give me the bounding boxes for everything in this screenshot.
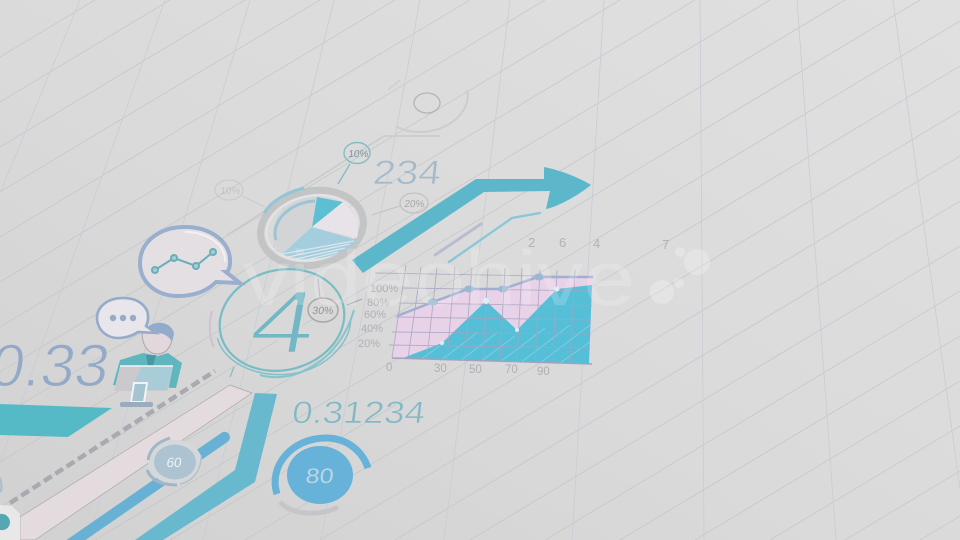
target icon top [388,80,468,132]
x labels: 0 [386,362,392,374]
x labels: 90 [537,366,550,378]
callout: 20% [372,193,428,215]
y labels [358,283,398,350]
gauge: 60 [147,438,202,485]
callout: 30% [308,279,338,322]
arrow [352,167,591,273]
slim lines [435,213,540,262]
faint callout: 10% [215,180,265,207]
pink band [20,385,252,540]
x labels [386,362,550,378]
teal band [0,404,112,437]
top labels: 7 [662,237,669,252]
callout: 20%: 20% [404,199,425,210]
number 0.31234: 0.31234 [290,395,427,430]
faint callout: 10%: 10% [220,186,241,197]
line series [397,277,593,316]
torso [113,353,182,388]
y labels: 100% [370,283,398,295]
gear icon [0,505,20,540]
top labels: 4 [593,236,600,251]
x labels: 70 [505,364,518,376]
gauge: 80 [275,438,368,513]
big ring with number 4 [205,255,362,390]
area chart [358,235,669,378]
stand [131,383,147,402]
laptop [114,366,173,391]
top labels [528,235,669,252]
big ring with number 4: 4 [243,272,325,373]
y labels: 60% [364,309,386,321]
speech bubble: dots [97,298,156,338]
callout: 10%: 10% [348,149,369,160]
person with laptop [113,323,182,407]
hair [146,323,174,342]
small arc [0,478,2,492]
connector line [227,136,440,235]
head [142,328,172,354]
callout: 30%: 30% [312,305,334,317]
blue bar [66,432,230,540]
baseline [392,358,592,364]
y labels: 20% [358,338,380,350]
gauge: 80: 80 [305,464,335,488]
number 234: 234 [371,154,443,192]
top labels: 6 [559,235,566,250]
gauge: 60: 60 [166,455,183,470]
pie chart [253,181,371,275]
teal path [135,393,277,540]
x labels: 50 [469,364,482,376]
grid [375,265,593,362]
top labels: 2 [528,235,535,250]
pink area [392,277,593,363]
y labels: 80% [367,297,389,309]
x labels: 30 [434,363,447,375]
callout: 10% [338,142,370,184]
watermark: videohive [243,234,635,322]
watermark logo [650,247,710,304]
dashed line [10,371,215,503]
speech bubble: line chart [140,227,240,296]
y labels: 40% [361,323,383,335]
teal area [403,285,592,364]
